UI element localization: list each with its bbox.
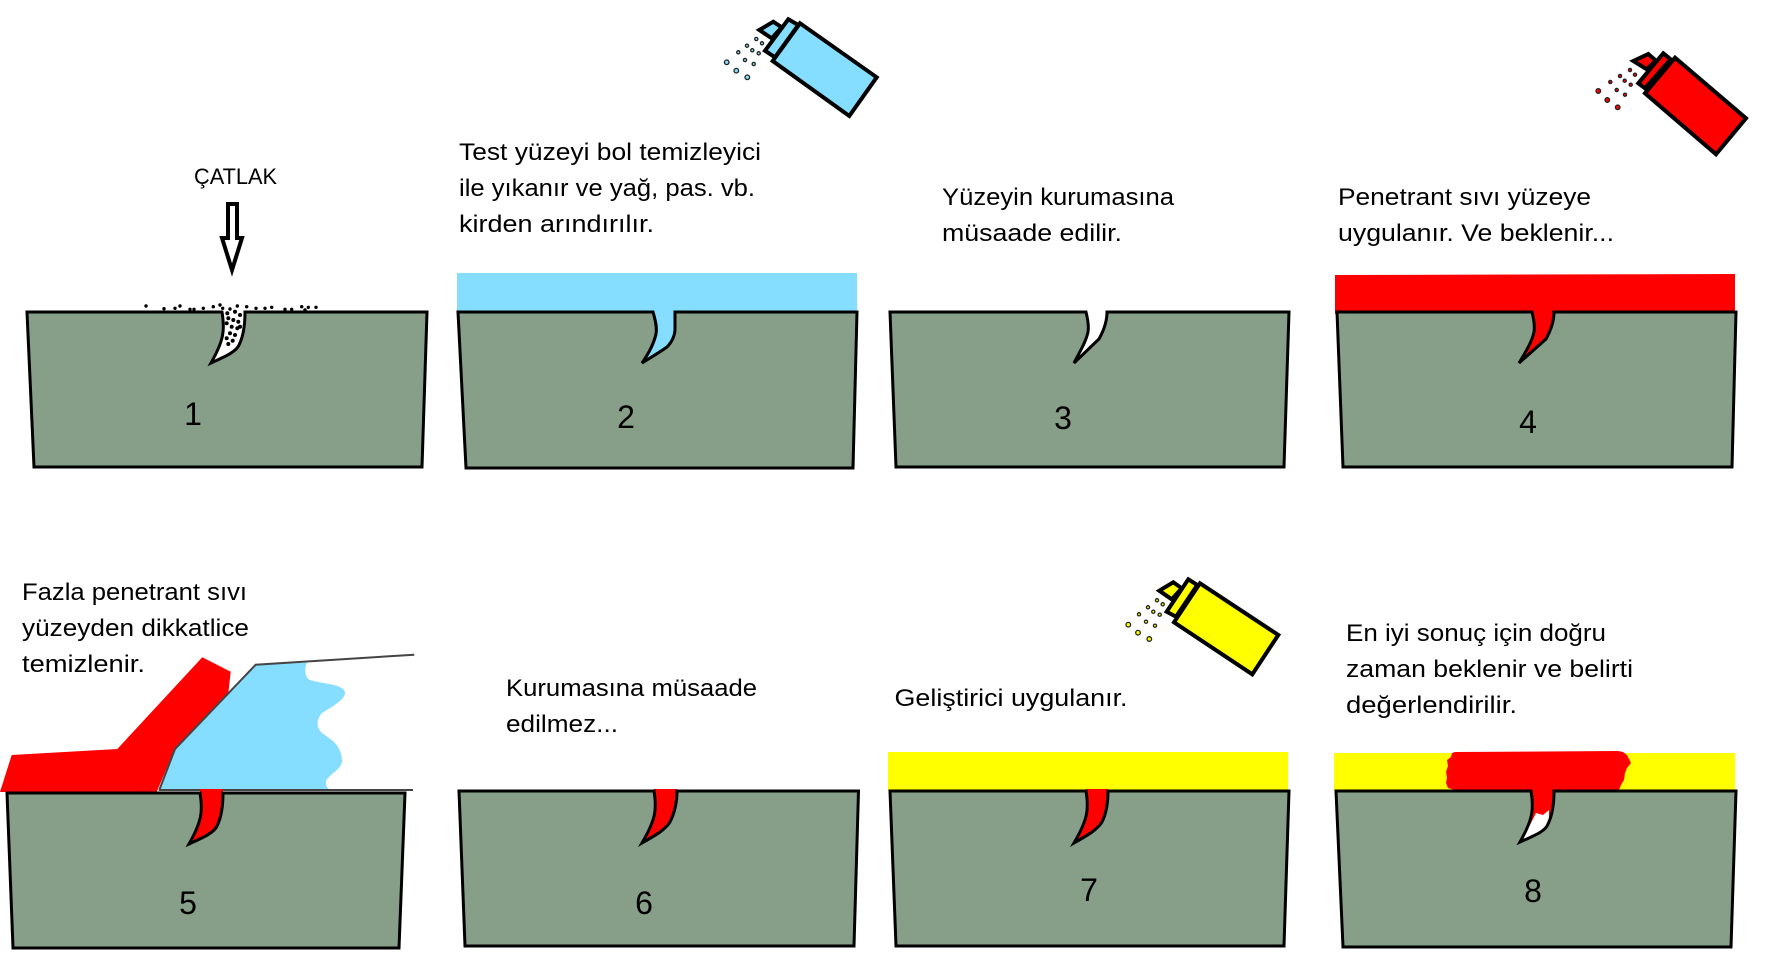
specimen block 3 <box>890 312 1289 467</box>
crack interior <box>211 310 245 363</box>
panel 7: developer <box>888 579 1289 946</box>
text: step 8: zaman beklenir ve belirti <box>1346 656 1633 683</box>
cleaner layer <box>457 273 857 366</box>
white bleed-out in crack <box>1520 810 1549 843</box>
penetrant in crack <box>1517 788 1557 846</box>
text: step 3 <box>942 184 1175 247</box>
penetrant in crack <box>186 789 226 846</box>
arrow: points to crack <box>222 204 242 270</box>
panel 5: wiping <box>0 579 414 948</box>
red indication blotch <box>1446 751 1631 790</box>
red soaked cloth <box>0 657 231 792</box>
panel 2: cleaning <box>457 19 877 468</box>
number 3: 3 <box>1054 400 1072 436</box>
text: step 6 <box>506 675 757 738</box>
developer layer <box>888 752 1288 791</box>
specimen block 8 <box>1336 791 1736 947</box>
number 7: 7 <box>1080 872 1098 908</box>
text: step 4 <box>1338 184 1614 247</box>
text: step 2: kirden arındırılır. <box>459 211 654 238</box>
panel 4: penetrant <box>1335 53 1746 467</box>
text: step 8: En iyi sonuç için doğru <box>1346 620 1606 647</box>
text: step 2: Test yüzeyi bol temizleyici <box>459 139 761 166</box>
label: ÇATLAK: ÇATLAK <box>194 164 277 189</box>
number 4: 4 <box>1519 404 1537 440</box>
panel 6: do not dry <box>459 675 858 946</box>
icon: red spray can <box>1596 53 1746 154</box>
number 6: 6 <box>635 885 653 921</box>
text: step 5: temizlenir. <box>22 651 145 678</box>
specimen block 1 <box>27 312 427 467</box>
text: step 2 <box>459 139 761 238</box>
number 5: 5 <box>179 885 197 921</box>
text: step 3: Yüzeyin kurumasına <box>942 184 1175 211</box>
text: step 5: yüzeyden dikkatlice <box>22 615 249 642</box>
dirt particles <box>144 303 318 346</box>
penetrant in crack <box>1071 789 1111 846</box>
number 8: 8 <box>1524 873 1542 909</box>
icon: blue spray can <box>724 19 877 116</box>
text: step 5: Fazla penetrant sıvı <box>22 579 247 606</box>
text: step 6: Kurumasına müsaade <box>506 675 757 702</box>
developer layer <box>1334 753 1735 791</box>
panel 1: crack with dirt <box>27 164 427 467</box>
cloth outline <box>159 655 414 790</box>
specimen block 7 <box>890 791 1289 946</box>
text: step 4: uygulanır. Ve beklenir... <box>1338 220 1614 247</box>
number 2: 2 <box>617 399 635 435</box>
blue cleaning cloth <box>159 663 345 791</box>
text: step 6: edilmez... <box>506 711 618 738</box>
specimen block 4 <box>1337 312 1736 467</box>
penetrant in crack <box>640 789 680 846</box>
number 1: 1 <box>184 396 202 432</box>
text: step 2: ile yıkanır ve yağ, pas. vb. <box>459 175 755 202</box>
specimen block 5 <box>7 793 405 948</box>
text: step 8 <box>1346 620 1633 719</box>
text: step 3: müsaade edilir. <box>942 220 1122 247</box>
specimen block 6 <box>459 791 858 946</box>
panel 3: drying <box>890 184 1289 467</box>
text: step 4: Penetrant sıvı yüzeye <box>1338 184 1591 211</box>
penetrant layer <box>1335 274 1735 366</box>
text: step 5 <box>22 579 249 678</box>
panel 8: evaluation <box>1334 620 1736 947</box>
text: step 8: değerlendirilir. <box>1346 692 1517 719</box>
icon: yellow spray can <box>1126 579 1278 674</box>
text: step 7: Geliştirici uygulanır. <box>894 685 1128 712</box>
specimen block 2 <box>458 312 857 468</box>
